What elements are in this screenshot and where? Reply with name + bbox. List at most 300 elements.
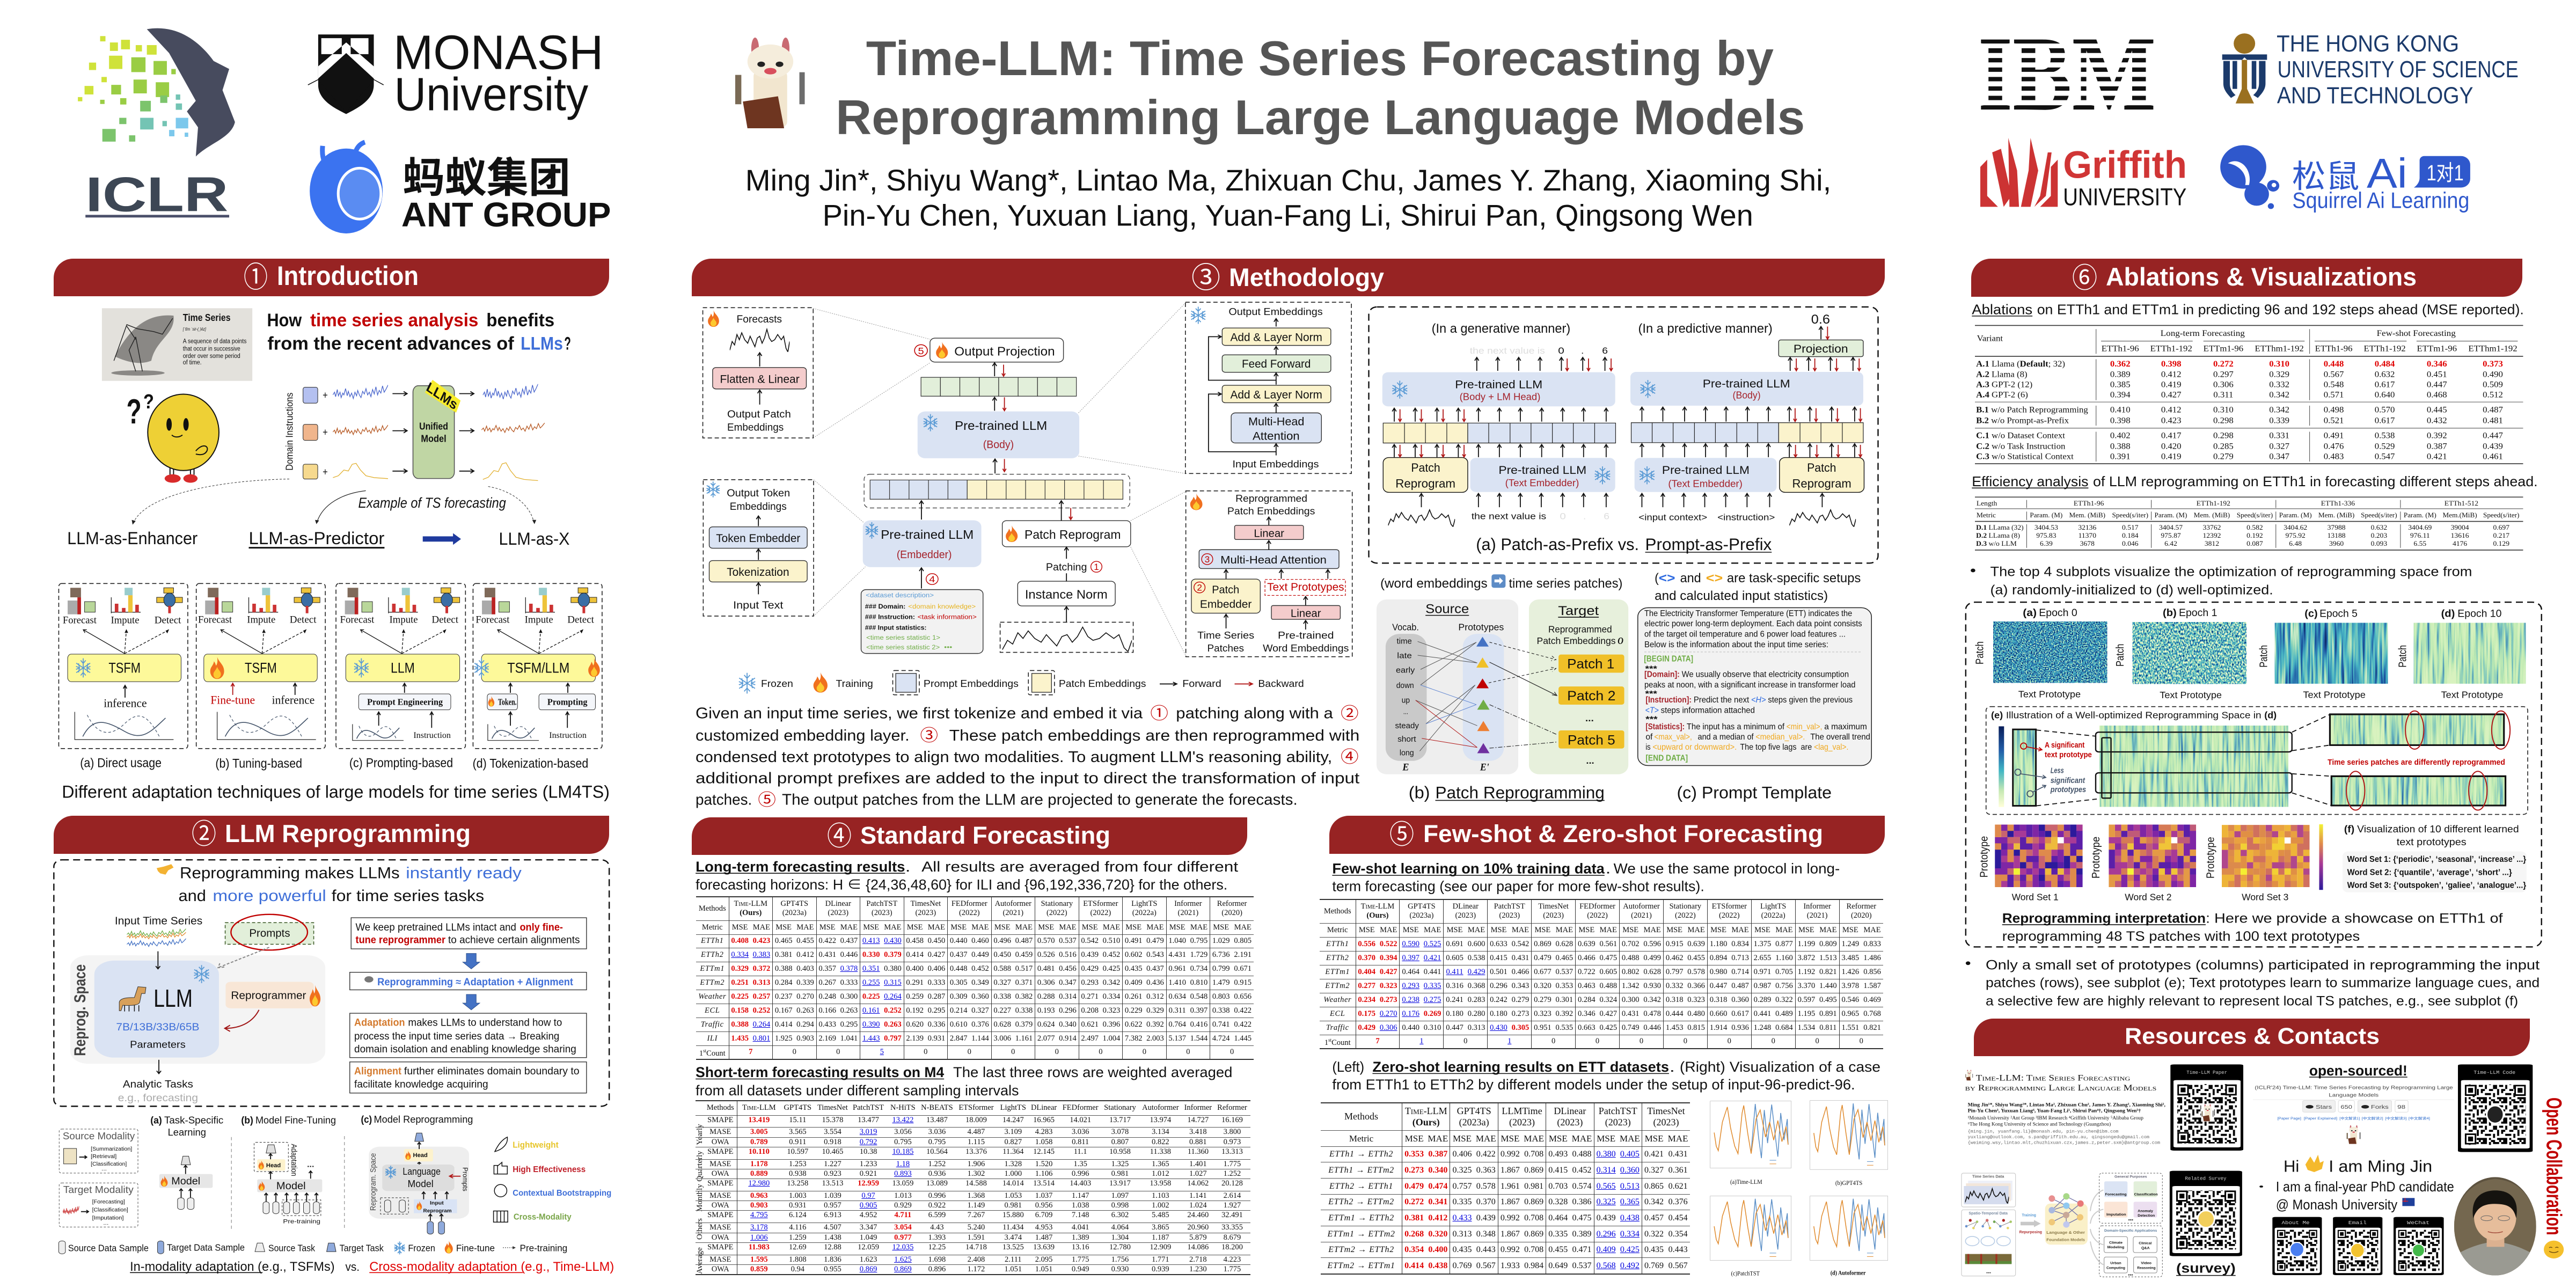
region: resources and contacts — [2170, 1063, 2566, 1276]
diagram: task-specific learning: Learning — [168, 1126, 206, 1138]
table: long-term forecasting results: 0.396 — [1103, 1020, 1120, 1029]
table: few-shot learning results: 0.301 — [1556, 995, 1573, 1004]
text: long-term results: All results are averaged from four different — [921, 859, 1238, 875]
table: ablations: Long-term Forecasting — [2161, 328, 2245, 338]
table: M4 short-term forecasting results: 1.771 — [1152, 1255, 1169, 1264]
region: LLM reprogramming panel — [54, 860, 614, 1274]
table: M4 short-term forecasting results: 0.981 — [1004, 1201, 1022, 1210]
table: few-shot learning results: 0.280 — [1468, 1009, 1485, 1018]
figure: general purposes: Imputation — [2106, 1213, 2126, 1217]
table: efficiency: 6.39 — [2040, 539, 2053, 547]
table: M4 short-term forecasting results: 13.258 — [787, 1179, 808, 1188]
table: zero-shot learning results: 0.268 — [1404, 1230, 1424, 1239]
table: M4 short-term forecasting results: 1.775 — [1224, 1265, 1241, 1274]
table: few-shot learning results: 0.714 — [1731, 967, 1749, 976]
table: long-term forecasting results: 0.413 — [862, 936, 880, 945]
table: M4 short-term forecasting results: 4.795 — [750, 1211, 768, 1219]
table: ablations: 0.412 — [2161, 405, 2182, 415]
panel: patch-as-prefix vs prompt-as-prefix: the next value is — [1470, 346, 1545, 356]
table: zero-shot learning results: 0.320 — [1428, 1230, 1447, 1239]
box: prompt template: <lag_val>. — [1814, 742, 1848, 752]
table: few-shot learning results: 0.546 — [1841, 995, 1859, 1004]
table: ablations: 0.339 — [2269, 415, 2289, 425]
table: long-term forecasting results: (2023) — [915, 909, 936, 917]
table: M4 short-term forecasting results: 1.003 — [789, 1191, 807, 1200]
table: long-term forecasting results: 0.300 — [840, 992, 858, 1001]
section band: Ablations and Visualizations — [1971, 255, 2522, 297]
box: prompt template: peaks at noon, with a significant increase in transformer load — [1644, 680, 1855, 690]
panel: tuning-based: Fine-tune — [210, 694, 255, 707]
legend: symbols: Source Task — [268, 1243, 315, 1254]
table: zero-shot learning results: 0.567 — [1476, 1261, 1496, 1270]
chart: word-set heatmaps: Prototype — [1978, 836, 1990, 877]
table: M4 short-term forecasting results: 10.38 — [860, 1147, 877, 1156]
table: few-shot learning results: 0.335 — [1424, 981, 1441, 990]
diagram: task-specific learning: Model — [171, 1175, 200, 1187]
table: few-shot learning results: 0.392 — [1556, 1009, 1573, 1018]
table: M4 short-term forecasting results: 13.917 — [1109, 1179, 1131, 1188]
table: ablations: 0.332 — [2269, 379, 2289, 389]
table: zero-shot learning results: 0.757 — [1453, 1182, 1472, 1191]
table: efficiency: Param. (M) — [2155, 511, 2187, 519]
captions: LM4TS panels: (b) Tuning-based — [215, 756, 302, 771]
table: efficiency: Param. (M) — [2404, 511, 2436, 519]
arrows: LLM roles: Example of TS forecasting — [358, 495, 506, 511]
table: long-term forecasting results: 0.439 — [1081, 950, 1099, 959]
logo: Ant Group: 蚂蚁集团 — [402, 156, 570, 201]
diagram: model fine-tuning: Model — [276, 1180, 306, 1192]
box: prompt template: <min_val>, — [1787, 722, 1822, 731]
table: long-term forecasting results: GPT4TS — [780, 899, 808, 908]
table: M4 short-term forecasting results: 4.283 — [1035, 1128, 1052, 1136]
table: zero-shot learning results: 0.431 — [1668, 1150, 1688, 1159]
table: long-term forecasting results: 0.436 — [1146, 978, 1164, 987]
table: zero-shot learning results: DLinear — [1554, 1106, 1586, 1116]
legend: reprogramming benefits: High Effectiveness — [513, 1165, 586, 1174]
table: long-term forecasting results: 0.333 — [928, 978, 945, 987]
table: ablations: 0.297 — [2213, 369, 2234, 379]
text: zero-shot learning: (Right) Visualization of a case — [1680, 1059, 1880, 1075]
table: zero-shot learning results: 0.414 — [1404, 1261, 1424, 1270]
table: M4 short-term forecasting results: 0.963 — [750, 1191, 768, 1200]
table: zero-shot learning results: 0.869 — [1524, 1166, 1543, 1175]
table: ablations: 0.391 — [2110, 451, 2131, 461]
table: few-shot learning results: 1.587 — [1863, 981, 1881, 990]
table: few-shot learning results: 0.463 — [1578, 981, 1596, 990]
table: long-term forecasting results: 7 — [749, 1048, 752, 1056]
table: efficiency: 3404.69 — [2408, 523, 2432, 531]
table: long-term forecasting results: 0.339 — [796, 978, 814, 987]
table: ablations: 0.521 — [2324, 415, 2344, 425]
chart: epoch heatmaps: Epoch 5 — [2319, 608, 2358, 619]
table: long-term forecasting results: 0.349 — [971, 978, 989, 987]
table: M4 short-term forecasting results: 3.134 — [1152, 1128, 1169, 1136]
table: M4 short-term forecasting results: 12.145 — [1033, 1147, 1055, 1156]
legend: symbols: Source Data Sample — [68, 1243, 149, 1254]
table: few-shot learning results: (2022a) — [1761, 911, 1785, 920]
text: subplots intro: The top 4 subplots visualize the optimization of reprogramming space from — [1990, 564, 2472, 579]
diagram: LLM with reprogrammer: Input Time Series — [115, 915, 202, 927]
table: M4 short-term forecasting results: 1.058 — [1035, 1138, 1052, 1146]
box: prompt template: <upward or downward>. — [1652, 742, 1737, 752]
table: few-shot learning results: 0.501 — [1490, 967, 1507, 976]
paper: title and authors: {weiming.wsy,lintao.mlt,chuzhixuan.czx,james.z,peter.sxm}@antgroup.com — [1968, 1140, 2160, 1145]
panel: tokenization-based: Instruction — [549, 731, 587, 740]
table: few-shot learning results: LightTS — [1760, 902, 1786, 911]
table: long-term forecasting results: 1.544 — [1190, 1034, 1208, 1043]
text: learned text prototypes: Word Set 1: {‘periodic’, ‘seasonal’, ‘increase’ ...} — [2347, 854, 2526, 864]
table: long-term forecasting results: 0.312 — [1146, 992, 1164, 1001]
table: ablations: 0.570 — [2375, 405, 2395, 415]
table: long-term forecasting results: 0.263 — [884, 1020, 902, 1029]
chart: word-set heatmaps: Prototype — [2205, 837, 2216, 879]
panel: prompting-based: Forecast — [340, 614, 375, 625]
table: long-term forecasting results: 0.288 — [1037, 992, 1055, 1001]
table: ablations: 0.362 — [2110, 358, 2131, 369]
table: long-term forecasting results: ETTm2 — [700, 978, 724, 987]
table: zero-shot learning results: 0.389 — [1572, 1230, 1591, 1239]
table: long-term forecasting results: (2022) — [1046, 909, 1067, 917]
table: long-term forecasting results: 3.006 — [993, 1034, 1011, 1043]
table: zero-shot learning results: MAE — [1428, 1133, 1448, 1143]
box: prompt template — [1638, 608, 1871, 766]
chart: forecast visualization plots: (b)GPT4TS — [1835, 1180, 1862, 1187]
table: M4 short-term forecasting results: 13.089 — [926, 1179, 948, 1188]
table: few-shot learning results: 0.522 — [1380, 939, 1397, 948]
box: output projection: Output Projection — [954, 345, 1055, 358]
table: zero-shot learning results: 0.537 — [1572, 1261, 1591, 1270]
table: long-term forecasting results: 0.336 — [928, 1020, 945, 1029]
table: M4 short-term forecasting results: 1.591 — [968, 1233, 985, 1242]
text: learned text prototypes: Word Set 2: {‘quantile’, ‘average’, ‘short’ ...} — [2347, 867, 2512, 877]
paper: title and authors: {ming.jin, yuanfang.li}@monash.edu, pin-yu.chen@ibm.com — [1968, 1130, 2119, 1135]
text: learned text prototypes: Word Set 3: {‘outspoken’, ‘galiee’, ‘analogue’...} — [2347, 881, 2526, 890]
table: M4 short-term forecasting results: 0.795 — [894, 1138, 912, 1146]
table: long-term forecasting results: MAE — [796, 923, 814, 932]
table: few-shot learning results: 0.628 — [1643, 967, 1661, 976]
table: M4 short-term forecasting results: PatchTST — [853, 1103, 884, 1112]
table: efficiency: ETTh1-336 — [2321, 499, 2355, 507]
table: long-term forecasting results: 0.392 — [1146, 1020, 1164, 1029]
table: few-shot learning results: PatchTST — [1494, 902, 1525, 911]
chart: forecast visualization plots — [1710, 1100, 1888, 1277]
paper: title and authors: by Reprogramming Large Language Models — [1965, 1084, 2156, 1093]
table: few-shot learning results: 0.722 — [1578, 967, 1596, 976]
table: long-term forecasting results: 0.347 — [1059, 978, 1077, 987]
panel: patch-as-prefix vs prompt-as-prefix: Patch — [1411, 461, 1440, 475]
panel: prompting-based: LLM — [391, 661, 415, 676]
table: zero-shot learning results: 0.578 — [1476, 1182, 1496, 1191]
table: M4 short-term forecasting results: 10.110 — [749, 1147, 770, 1156]
table: long-term forecasting results: 0.455 — [796, 936, 814, 945]
diagram: LLM with reprogrammer: Reprogrammer — [231, 990, 306, 1001]
diagram: LLM with reprogrammer — [70, 914, 325, 1104]
table: M4 short-term forecasting results: 1.252 — [1224, 1169, 1241, 1178]
panel: well-optimized reprogramming space: prototypes — [2050, 786, 2086, 794]
diagram: patch reprogramming source and target: steady — [1395, 722, 1419, 730]
box: prompt template: The top five lags are — [1740, 742, 1812, 752]
table: few-shot learning results: ETSformer — [1712, 902, 1747, 911]
table: long-term forecasting results: 0.251 — [731, 978, 749, 987]
text: few-shot learning — [1332, 860, 1840, 894]
box: prompt template: <T> — [1645, 705, 1659, 715]
table: efficiency: 3404.53 — [2035, 523, 2058, 531]
table: M4 short-term forecasting results: 1.365 — [1152, 1160, 1169, 1168]
table: long-term forecasting results: Metric — [702, 923, 723, 932]
diagram: task-specific learning: Task-Specific — [164, 1115, 223, 1126]
panel: patch-as-prefix vs prompt-as-prefix — [1369, 307, 1878, 563]
table: long-term forecasting results: ETTh2 — [701, 950, 723, 959]
heading: instantly ready — [157, 863, 522, 905]
text: open-sourced repository: (ICLR'24) Time-LLM: Time Series Forecasting by Reprogramming Large — [2255, 1085, 2453, 1091]
chart: epoch heatmaps: Epoch 10 — [2457, 608, 2501, 619]
table: M4 short-term forecasting results: 1.698 — [928, 1255, 946, 1264]
table: long-term forecasting results: 0.227 — [993, 1006, 1011, 1015]
table: M4 short-term forecasting results: 0.939 — [1152, 1265, 1169, 1274]
table: few-shot learning results: 0.691 — [1446, 939, 1463, 948]
QR card: related survey: Related Survey — [2185, 1176, 2227, 1182]
heading: instantly ready: more powerful — [213, 887, 326, 905]
table: long-term forecasting results: 0.588 — [993, 964, 1011, 973]
table: few-shot learning results: 1.342 — [1622, 981, 1640, 990]
table: M4 short-term forecasting results: N-BEATS — [921, 1103, 953, 1112]
table: ablations: 0.346 — [2427, 358, 2447, 369]
table: few-shot learning results: 0.590 — [1402, 939, 1419, 948]
section band: Standard Forecasting — [692, 815, 1247, 855]
text boxes: reprogramming explanation: Reprogramming ≈ Adaptation + Alignment — [377, 976, 573, 987]
table: M4 short-term forecasting results: 3.036 — [928, 1128, 946, 1136]
chart: epoch heatmaps — [1974, 606, 2526, 701]
chart: word-set heatmaps: Word Set 2 — [2125, 892, 2171, 903]
diagram: patch reprogramming source and target: Vocab. — [1392, 621, 1419, 632]
table: long-term forecasting results: MSE — [863, 923, 879, 932]
table: efficiency: ETTh1-96 — [2074, 499, 2104, 507]
table: few-shot learning results: 0.768 — [1863, 1009, 1881, 1018]
table: efficiency: 6.48 — [2289, 539, 2302, 547]
table: long-term forecasting results: 0.903 — [796, 1034, 814, 1043]
panel: token embedder — [703, 480, 814, 616]
arrows: LLM roles — [131, 479, 536, 525]
table: few-shot learning results: 1.160 — [1775, 953, 1793, 962]
panel: patch-as-prefix vs prompt-as-prefix: 6 — [1602, 346, 1608, 356]
section band: Few-shot and Zero-shot Forecasting — [1329, 813, 1885, 854]
region: title block — [735, 31, 1831, 232]
table: zero-shot learning results: 0.314 — [1597, 1166, 1616, 1175]
chart: epoch heatmaps: Text Prototype — [2160, 690, 2222, 701]
region: few-shot and zero-shot headings and plots — [1332, 860, 1888, 1277]
diagram: patch reprogramming source and target: E — [1402, 762, 1409, 773]
table: long-term forecasting results: 0.801 — [753, 1034, 770, 1043]
captions: b and c — [1409, 784, 1832, 802]
box: prompt template: *** — [1645, 689, 1657, 699]
table: zero-shot learning results: 0.435 — [1644, 1245, 1664, 1254]
table: few-shot learning results: 0.425 — [1599, 1023, 1617, 1031]
box: instance norm and patching — [1000, 561, 1133, 653]
text: few-shot learning: term forecasting (see our paper for more few-shot results). — [1332, 878, 1704, 894]
table: long-term forecasting results: 0.425 — [1103, 964, 1120, 973]
figure: domain-specific applications: Modeling — [2107, 1246, 2124, 1249]
box: pre-trained LLM embedder: Pre-trained LLM — [881, 528, 974, 541]
table: few-shot learning results: 0.802 — [1622, 967, 1640, 976]
table: long-term forecasting results: 0.381 — [775, 950, 792, 959]
table: long-term forecasting results: 0.487 — [1015, 936, 1033, 945]
panel: transformer body — [1185, 302, 1351, 473]
table: few-shot learning results: 1.513 — [1819, 953, 1837, 962]
table: efficiency: Length — [1977, 499, 1997, 507]
diagram: patch reprogramming source and target: Source — [1425, 601, 1469, 616]
table: zero-shot learning results: 0.325 — [1597, 1197, 1616, 1206]
table: M4 short-term forecasting results: 12.035 — [892, 1243, 913, 1252]
table: M4 short-term forecasting results: 3.347 — [860, 1223, 877, 1232]
table: long-term forecasting results: 0.342 — [1103, 978, 1120, 987]
table: few-shot learning results: 0.556 — [1358, 939, 1375, 948]
table: ablations: 0.279 — [2213, 451, 2234, 461]
table: ablations: 0.398 — [2161, 358, 2182, 369]
table: few-shot learning results: (2022) — [1675, 911, 1696, 920]
heading: prompt template note: ( — [1655, 572, 1659, 586]
table: zero-shot learning results: MSE — [1405, 1133, 1424, 1143]
panel: well-optimized reprogramming space: Illustration of a Well-optimized Reprogramming Space in — [2006, 710, 2262, 721]
table: ablations: ETTh1-192 — [2363, 343, 2406, 353]
figure: domain-specific applications — [2099, 1226, 2162, 1277]
table: few-shot learning results: 0.464 — [1402, 967, 1419, 976]
table: ablations: 0.571 — [2324, 390, 2344, 399]
table: few-shot learning results: 0.293 — [1402, 981, 1419, 990]
table: efficiency: 13188 — [2328, 531, 2346, 539]
table: M4 short-term forecasting results: 13.513 — [822, 1179, 843, 1188]
table: long-term forecasting results: 0.422 — [818, 936, 836, 945]
table: long-term forecasting results: 0.656 — [1234, 992, 1252, 1001]
diagram: patch reprogramming source and target: O — [1618, 636, 1623, 647]
table: long-term forecasting results: MAE — [1146, 923, 1164, 932]
table: zero-shot learning results — [1321, 1102, 1690, 1274]
table: M4 short-term forecasting results: 11.360 — [1188, 1147, 1209, 1156]
table: M4 short-term forecasting results: 20.128 — [1221, 1179, 1243, 1188]
table: M4 short-term forecasting results: 3.865 — [1152, 1223, 1169, 1232]
table: efficiency: Mem. (MiB) — [2069, 511, 2105, 519]
region: paper abstract and survey figure — [1962, 1070, 2165, 1277]
table: few-shot learning results: Metric — [1327, 925, 1348, 934]
table: few-shot learning results: 0.488 — [1599, 981, 1617, 990]
text: efficiency heading: of LLM reprogramming on ETTh1 in forecasting different steps ahead. — [2093, 474, 2538, 489]
photo: presenter portrait — [2454, 1177, 2536, 1276]
labels: M4 sampling groups: Quarterly — [696, 1151, 704, 1182]
caption: in-modality vs cross-modality: In-modality adaptation (e.g., TSFMs) — [130, 1260, 335, 1274]
table: few-shot learning results: 1.375 — [1754, 939, 1771, 948]
table: long-term forecasting results: 1.445 — [1234, 1034, 1252, 1043]
logo: Monash University: MONASH — [393, 25, 603, 79]
text: subplots intro: (a) randomly-initialized to (d) well-optimized. — [1990, 583, 2273, 598]
table: long-term forecasting results: 1.161 — [1015, 1034, 1033, 1043]
table: M4 short-term forecasting results: 0.981 — [1111, 1169, 1129, 1178]
table: few-shot learning results: 0.431 — [1512, 953, 1529, 962]
table: ablations: 0.640 — [2375, 390, 2395, 399]
table: M4 short-term forecasting results: 1.227 — [824, 1160, 841, 1168]
panel: patch reprogram detail: Reprogrammed — [1235, 493, 1307, 504]
table: long-term forecasting results: 0.671 — [1234, 964, 1252, 973]
box: pre-trained LLM body: (Body) — [983, 438, 1014, 451]
logo: HKUST: UNIVERSITY OF SCIENCE — [2278, 57, 2519, 83]
section band: Methodology: ③ — [1191, 254, 1220, 296]
table: few-shot learning results: MAE — [1468, 925, 1485, 934]
table: few-shot learning results: MAE — [1731, 925, 1749, 934]
text: open-sourced repository: [中文解读2] — [2362, 1116, 2383, 1121]
table: zero-shot learning results: 0.387 — [1428, 1150, 1447, 1159]
table: M4 short-term forecasting results: 5.879 — [1189, 1233, 1207, 1242]
text boxes: reprogramming explanation: We keep pretrained LLMs intact and — [356, 921, 516, 933]
table: few-shot learning results: Weather — [1323, 995, 1351, 1004]
table: M4 short-term forecasting results: 1.053 — [1004, 1191, 1022, 1200]
figure: domain-specific applications: Domain-Specific Applications — [2104, 1229, 2157, 1233]
table: M4 short-term forecasting results: 0.955 — [824, 1265, 841, 1274]
table: long-term forecasting results: (2020) — [1221, 909, 1242, 917]
table: few-shot learning results: 0.175 — [1358, 1009, 1375, 1018]
text: open-sourced repository: 650 — [2340, 1104, 2352, 1110]
table: M4 short-term forecasting results: MASE — [709, 1223, 731, 1232]
table: efficiency — [1975, 497, 2523, 550]
table: zero-shot learning results: 0.361 — [1668, 1166, 1688, 1175]
table: ablations: 0.490 — [2483, 369, 2503, 379]
table: ablations: 0.567 — [2324, 369, 2344, 379]
table: long-term forecasting results: 0.961 — [1168, 964, 1186, 973]
table: few-shot learning results: TimesNet — [1538, 902, 1569, 911]
diagram: task-specific learning: (a) — [150, 1115, 162, 1126]
diagram: patch reprogramming source and target: Patch 1 — [1567, 656, 1614, 671]
table: few-shot learning results: (2023) — [1543, 911, 1564, 920]
table: few-shot learning results: 0.495 — [1819, 995, 1837, 1004]
table: long-term forecasting results: 0.161 — [862, 1006, 880, 1015]
diagram: patch reprogramming source and target: Patch 5 — [1568, 733, 1615, 748]
table: efficiency: 975.83 — [2036, 531, 2057, 539]
box: prompt prefix: ### Domain: — [865, 603, 905, 610]
table: long-term forecasting results: 5 — [880, 1048, 884, 1056]
table: M4 short-term forecasting results: 16.169 — [1221, 1115, 1243, 1124]
table: zero-shot learning results: 0.327 — [1644, 1166, 1664, 1175]
table: few-shot learning results: 0.238 — [1402, 995, 1419, 1004]
text: methodology description: The output patches from the LLM are projected to generate the forecasts. — [782, 791, 1298, 808]
table: M4 short-term forecasting results: 13.717 — [1109, 1115, 1131, 1124]
diagram: unified model for time series: + — [323, 465, 328, 478]
table: M4 short-term forecasting results: 1.233 — [860, 1160, 877, 1168]
table: M4 short-term forecasting results: 4.43 — [930, 1223, 944, 1232]
table: M4 short-term forecasting results: 6.599 — [928, 1211, 946, 1219]
table: few-shot learning results — [1320, 899, 1883, 1049]
table: long-term forecasting results: MAE — [1015, 923, 1033, 932]
panel: prompting-based: Instruction — [413, 731, 451, 740]
table: ablations: A.2 Llama (8) — [1976, 369, 2028, 379]
table: M4 short-term forecasting results: 2.614 — [1224, 1191, 1241, 1200]
table: few-shot learning results: 0.431 — [1622, 1009, 1640, 1018]
table: long-term forecasting results — [696, 896, 1254, 1060]
panel: tuning-based: Detect — [290, 614, 317, 625]
table: zero-shot learning results: ETTh1 → ETTm2 — [1328, 1166, 1394, 1175]
table: few-shot learning results: 0.705 — [1775, 967, 1793, 976]
table: few-shot learning results: 0.480 — [1687, 1009, 1705, 1018]
table: long-term forecasting results: 0.167 — [775, 1006, 792, 1015]
table: M4 short-term forecasting results: Autoformer — [1142, 1103, 1179, 1112]
table: long-term forecasting results: 0 — [1230, 1048, 1234, 1056]
panel: patch-as-prefix vs prompt-as-prefix: Pre-trained LLM — [1662, 463, 1750, 477]
table: ablations: 0.421 — [2427, 451, 2447, 461]
table: M4 short-term forecasting results: 12.980 — [748, 1179, 770, 1188]
table: long-term forecasting results: 0.458 — [906, 936, 924, 945]
diagram: model reprogramming: Reprogram. Space — [368, 1153, 377, 1211]
table: long-term forecasting results: MSE — [1125, 923, 1141, 932]
table: zero-shot learning results: ETTh2 → ETTh1 — [1329, 1182, 1393, 1191]
table: long-term forecasting results: 0.610 — [950, 1020, 967, 1029]
table: M4 short-term forecasting results: N-HiTS — [890, 1103, 916, 1112]
table: long-term forecasting results: 0.248 — [818, 992, 836, 1001]
